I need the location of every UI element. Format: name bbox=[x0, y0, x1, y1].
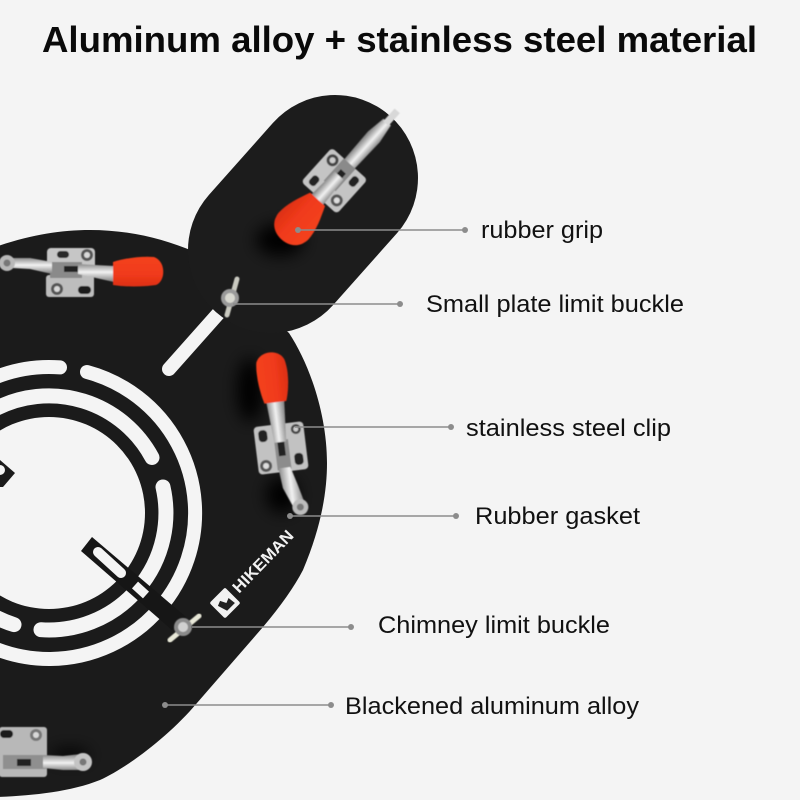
notch at left edge bbox=[0, 460, 15, 487]
label: rubber grip bbox=[295, 217, 603, 244]
clip: small plate stainless steel clip with rubber grip bbox=[264, 95, 415, 256]
label: stainless steel clip: stainless steel clip bbox=[466, 415, 671, 442]
label: rubber gasket bbox=[287, 503, 640, 530]
title: Aluminum alloy + stainless steel material bbox=[42, 19, 757, 60]
label: rubber grip: rubber grip bbox=[481, 217, 603, 244]
label: blackened aluminum alloy bbox=[162, 693, 640, 720]
label: small plate limit buckle: Small plate limit buckle bbox=[426, 291, 684, 318]
panel: large blackened plate bbox=[0, 230, 327, 797]
label: chimney limit buckle: Chimney limit buckle bbox=[378, 612, 610, 639]
clip shadows bbox=[50, 224, 304, 761]
panel: small oval plate bbox=[271, 178, 335, 250]
label: small plate limit buckle bbox=[233, 291, 684, 318]
plate body bbox=[0, 230, 327, 797]
label: blackened aluminum alloy: Blackened aluminum alloy bbox=[345, 693, 640, 720]
label: chimney limit buckle bbox=[192, 612, 610, 639]
brand name: HIKEMAN bbox=[230, 527, 297, 597]
ring slots bbox=[0, 306, 225, 659]
logo: HIKEMAN bbox=[209, 527, 297, 619]
icon: logo badge bbox=[209, 587, 241, 619]
label: stainless steel clip bbox=[295, 415, 671, 442]
chimney limit bar bbox=[81, 537, 186, 630]
clip: right stainless steel clip with rubber grip bbox=[244, 349, 314, 520]
icon: small plate wing nut bbox=[221, 279, 239, 315]
clip: bottom stainless steel clip bbox=[0, 727, 92, 777]
label: rubber gasket: Rubber gasket bbox=[475, 503, 640, 530]
clip: left stainless steel clip with rubber grip bbox=[0, 248, 163, 297]
icon: chimney wing nut bbox=[170, 616, 199, 640]
centre opening bbox=[0, 417, 145, 609]
